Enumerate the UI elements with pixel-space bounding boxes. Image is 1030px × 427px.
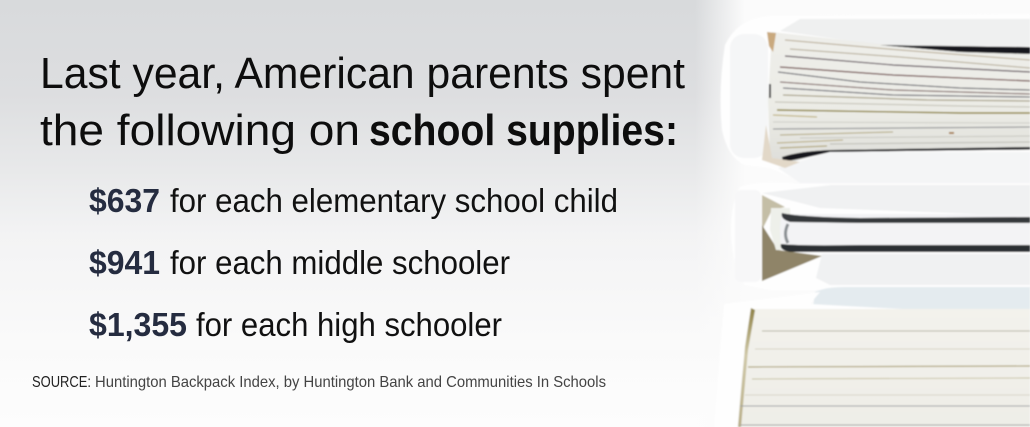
source note: SOURCE:: [32, 374, 91, 391]
item: elementary school: $637: [89, 182, 160, 219]
item: elementary school: for each elementary school child: [170, 182, 618, 219]
item: middle school: $941: [89, 244, 160, 281]
heading: [40, 49, 685, 155]
heading: the following on: [40, 106, 360, 155]
source note: Huntington Backpack Index, by Huntington Bank and Communities In Schools: [95, 374, 606, 391]
item: high school: $1,355: [89, 306, 187, 343]
book: bottom: [714, 287, 1030, 427]
heading: Last year, American parents spent: [40, 49, 685, 98]
item: high school: for each high schooler: [196, 306, 502, 343]
item: middle school: for each middle schooler: [170, 244, 510, 281]
book: top: [721, 14, 1030, 183]
book: middle: [731, 183, 1030, 290]
photo: stack of white books: [714, 14, 1030, 427]
heading: school supplies:: [369, 106, 678, 155]
